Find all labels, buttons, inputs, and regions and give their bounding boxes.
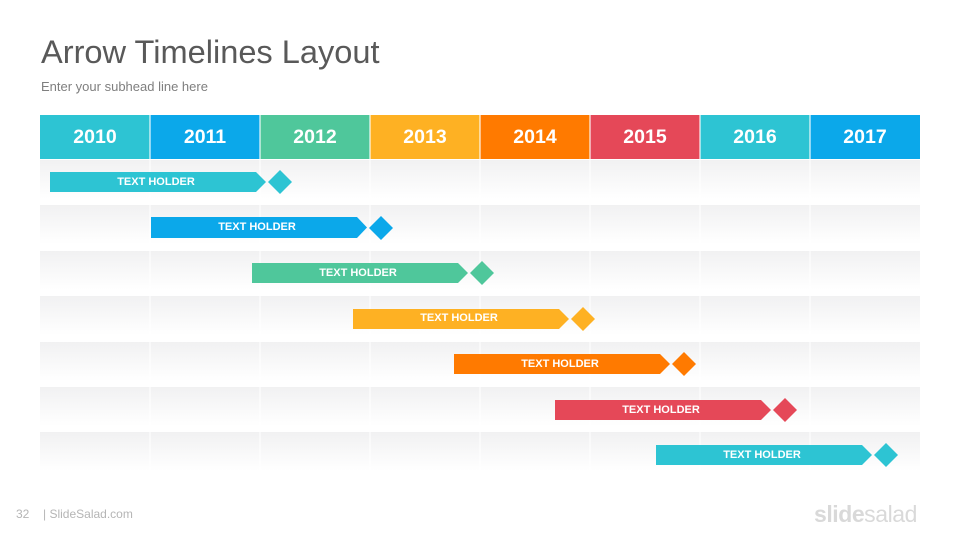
year 2010: 2010 bbox=[73, 126, 117, 148]
arrow 4 with milestone bbox=[353, 307, 595, 331]
arrow 2 with milestone: TEXT HOLDER bbox=[218, 221, 296, 233]
year 2012: 2012 bbox=[293, 126, 337, 148]
year 2012 bbox=[260, 115, 370, 159]
arrow 5 with milestone: TEXT HOLDER bbox=[521, 358, 599, 370]
logo wordmark: slidesalad bbox=[814, 501, 917, 527]
year 2014: 2014 bbox=[513, 126, 557, 148]
arrow 6 with milestone: TEXT HOLDER bbox=[622, 404, 700, 416]
page number: 32 bbox=[16, 507, 29, 521]
arrow 1 with milestone: TEXT HOLDER bbox=[117, 176, 195, 188]
arrow 6 with milestone bbox=[555, 398, 797, 422]
arrow 3 with milestone: TEXT HOLDER bbox=[319, 267, 397, 279]
arrow 5 with milestone bbox=[454, 352, 696, 376]
year 2016 bbox=[700, 115, 810, 159]
title: Arrow Timelines Layout bbox=[41, 33, 380, 70]
year 2013: 2013 bbox=[403, 126, 447, 148]
year 2015 bbox=[590, 115, 700, 159]
arrow 2 with milestone bbox=[151, 216, 393, 240]
year 2014 bbox=[480, 115, 590, 159]
year 2010 bbox=[40, 115, 150, 159]
arrow 3 with milestone bbox=[252, 261, 494, 285]
year 2016: 2016 bbox=[733, 126, 777, 148]
year header row bbox=[40, 115, 920, 159]
arrow 4 with milestone: TEXT HOLDER bbox=[420, 312, 498, 324]
year 2017: 2017 bbox=[843, 126, 887, 148]
year 2017 bbox=[810, 115, 920, 159]
arrow 7 with milestone bbox=[656, 443, 898, 467]
footer site name: | SlideSalad.com bbox=[43, 507, 133, 521]
subhead: Enter your subhead line here bbox=[41, 79, 208, 94]
year 2013 bbox=[370, 115, 480, 159]
arrow 7 with milestone: TEXT HOLDER bbox=[723, 449, 801, 461]
year 2011 bbox=[150, 115, 260, 159]
year 2011: 2011 bbox=[184, 126, 226, 148]
arrow 1 with milestone bbox=[50, 170, 292, 194]
year 2015: 2015 bbox=[623, 126, 667, 148]
